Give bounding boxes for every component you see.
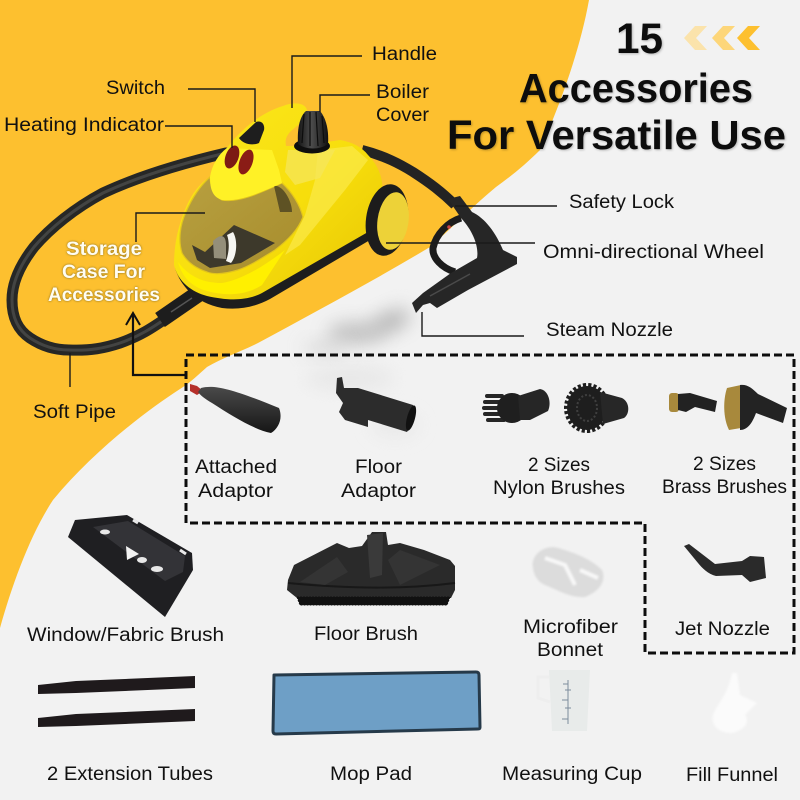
accessory: 2 sizes brass brushes <box>662 385 787 498</box>
accessory: fill funnel <box>686 673 778 786</box>
accessory: mop pad <box>273 672 480 785</box>
label: Storage Case For Accessories: Accessories <box>48 285 160 306</box>
accessory: attached adaptor <box>190 384 281 502</box>
text: Microfiber Bonnet: Bonnet <box>537 640 604 661</box>
text: Window/Fabric Brush: Window/Fabric Brush <box>27 625 224 646</box>
text: 2 Sizes Nylon Brushes: Nylon Brushes <box>493 478 625 499</box>
switch <box>239 122 264 144</box>
top dome <box>210 148 282 200</box>
hose: soft pipe left loop <box>12 153 226 350</box>
text: 2 Sizes Nylon Brushes <box>493 455 625 499</box>
storage case window <box>180 177 303 274</box>
text: Measuring Cup: Measuring Cup <box>502 764 642 785</box>
label: Boiler Cover: Cover <box>376 105 430 126</box>
text: 2 Extension Tubes: 2 Extension Tubes <box>47 764 213 785</box>
text: Floor Adaptor <box>341 457 417 502</box>
text: Attached Adaptor: Attached <box>195 457 277 478</box>
wheel <box>361 181 413 259</box>
title line: For Versatile Use: For Versatile Use <box>447 112 786 158</box>
title line: Accessories: Accessories <box>519 65 753 111</box>
small nylon brush <box>484 389 550 423</box>
steam cloud <box>303 303 419 437</box>
hose connector <box>160 289 205 320</box>
label: Heating Indicator: Heating Indicator <box>4 115 165 136</box>
dashed box: accessories stored in case <box>186 355 794 653</box>
heating indicator lights <box>222 144 257 176</box>
text: 2 Sizes Brass Brushes: Brass Brushes <box>662 477 787 498</box>
text: 2 Sizes Nylon Brushes: 2 Sizes <box>528 455 590 476</box>
label: Omni-directional Wheel: Omni-directional Wheel <box>543 242 764 263</box>
title <box>447 15 786 158</box>
accessory: floor brush <box>287 532 455 645</box>
label: Boiler Cover <box>376 82 430 126</box>
hose: right section <box>362 150 455 205</box>
small brass brush <box>669 393 717 412</box>
text: 2 Sizes Brass Brushes: 2 Sizes <box>693 454 756 475</box>
label: Storage Case For Accessories <box>48 239 160 306</box>
text: Microfiber Bonnet <box>523 617 619 661</box>
dark item in window <box>274 186 292 212</box>
label: Storage Case For Accessories: Case For <box>62 262 146 283</box>
accessory: microfiber bonnet <box>523 547 619 661</box>
arrow from accessories box to storage case <box>126 313 186 375</box>
label: Boiler Cover: Boiler <box>376 82 430 103</box>
text: Attached Adaptor <box>195 457 277 502</box>
accessory: window/fabric brush <box>27 515 224 646</box>
text: Floor Adaptor: Floor <box>355 457 403 478</box>
storage case contents <box>192 225 275 268</box>
boiler cover knob <box>294 111 330 154</box>
callout lines <box>70 56 557 387</box>
icon: triple chevrons <box>684 26 760 50</box>
yellow curved background shape <box>0 0 589 628</box>
steam cleaner machine <box>12 103 517 350</box>
label: Soft Pipe: Soft Pipe <box>33 402 116 423</box>
accessory: floor adaptor <box>336 377 418 502</box>
accessory: jet nozzle <box>675 544 770 640</box>
text: Floor Adaptor: Adaptor <box>341 481 417 502</box>
large nylon brush <box>567 386 628 430</box>
label: Steam Nozzle: Steam Nozzle <box>546 320 673 341</box>
text: Floor Brush: Floor Brush <box>314 624 418 645</box>
label: Storage Case For Accessories: Storage <box>66 239 142 260</box>
text: 2 Sizes Brass Brushes <box>662 454 787 498</box>
text: Jet Nozzle: Jet Nozzle <box>675 619 770 640</box>
pale shoulder behind knob <box>285 150 335 185</box>
highlight panel on body <box>285 146 368 255</box>
large brass brush <box>724 385 787 430</box>
text: Fill Funnel: Fill Funnel <box>686 765 778 786</box>
white accessory inside case <box>226 232 236 263</box>
accessory: 2 extension tubes <box>38 676 213 785</box>
machine body <box>174 103 382 299</box>
black base strip <box>175 222 374 309</box>
trigger handle gun <box>412 196 517 313</box>
text: Attached Adaptor: Adaptor <box>198 481 274 502</box>
label: Handle: Handle <box>372 44 437 65</box>
title number: 15 <box>616 15 663 63</box>
accessory: measuring cup <box>502 670 642 785</box>
label: Switch: Switch <box>106 78 165 99</box>
label: Safety Lock: Safety Lock <box>569 192 675 213</box>
text: Mop Pad: Mop Pad <box>330 764 412 785</box>
accessory: 2 sizes nylon brushes <box>484 386 628 499</box>
front rim highlight <box>178 250 285 294</box>
text: Microfiber Bonnet: Microfiber <box>523 617 619 638</box>
